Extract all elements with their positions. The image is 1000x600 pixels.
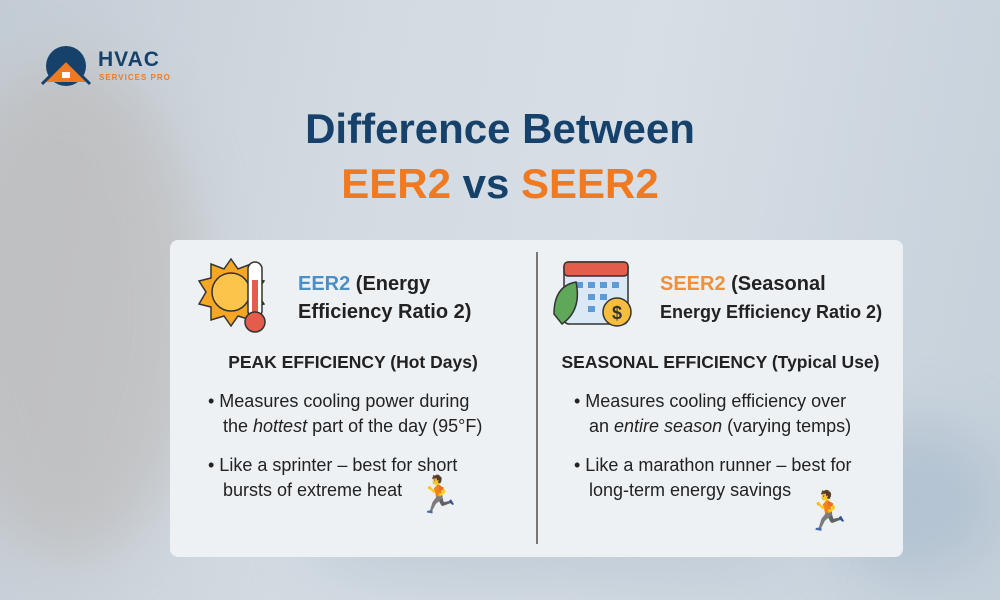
icon: calendar leaf coin [553, 261, 632, 327]
heading: EER2: EER2 (Energy [298, 273, 430, 295]
title [305, 105, 695, 207]
heading: SEER2 [660, 273, 882, 322]
heading: EER2: Efficiency Ratio 2) [298, 301, 471, 323]
icon: sun thermometer [198, 258, 266, 333]
bullets: • Like a marathon runner – best for [574, 455, 851, 475]
bullets [208, 391, 482, 500]
icon: calendar leaf coin: $ [612, 303, 622, 323]
panel: EER2 [198, 258, 482, 515]
bullets: • Measures cooling power during [208, 391, 469, 411]
icon: runner: 🏃 [804, 491, 851, 533]
logo: SERVICES PRO [99, 73, 171, 82]
card [170, 240, 903, 557]
subheading: PEAK EFFICIENCY (Hot Days) [228, 352, 478, 372]
heading: SEER2: SEER2 (Seasonal [660, 273, 826, 295]
bullets: • Like a sprinter – best for short [208, 455, 457, 475]
panel: SEER2 [553, 261, 882, 533]
heading: EER2 [298, 273, 471, 323]
subheading: SEASONAL EFFICIENCY (Typical Use) [562, 352, 879, 372]
heading: SEER2: Energy Efficiency Ratio 2) [660, 302, 882, 322]
bullets [574, 391, 852, 500]
logo [41, 46, 171, 86]
bullets: • Measures cooling efficiency over [574, 391, 846, 411]
bullets: bursts of extreme heat [223, 480, 402, 500]
logo: HVAC [98, 48, 160, 71]
bullets: long-term energy savings [589, 480, 791, 500]
icon: sprinter: 🏃 [416, 474, 461, 515]
bullets: an entire season (varying temps) [589, 416, 851, 436]
title: EER2 vs SEER2 [341, 160, 659, 207]
bullets: the hottest part of the day (95°F) [223, 416, 482, 436]
divider [536, 252, 538, 544]
title: Difference Between [305, 105, 695, 152]
